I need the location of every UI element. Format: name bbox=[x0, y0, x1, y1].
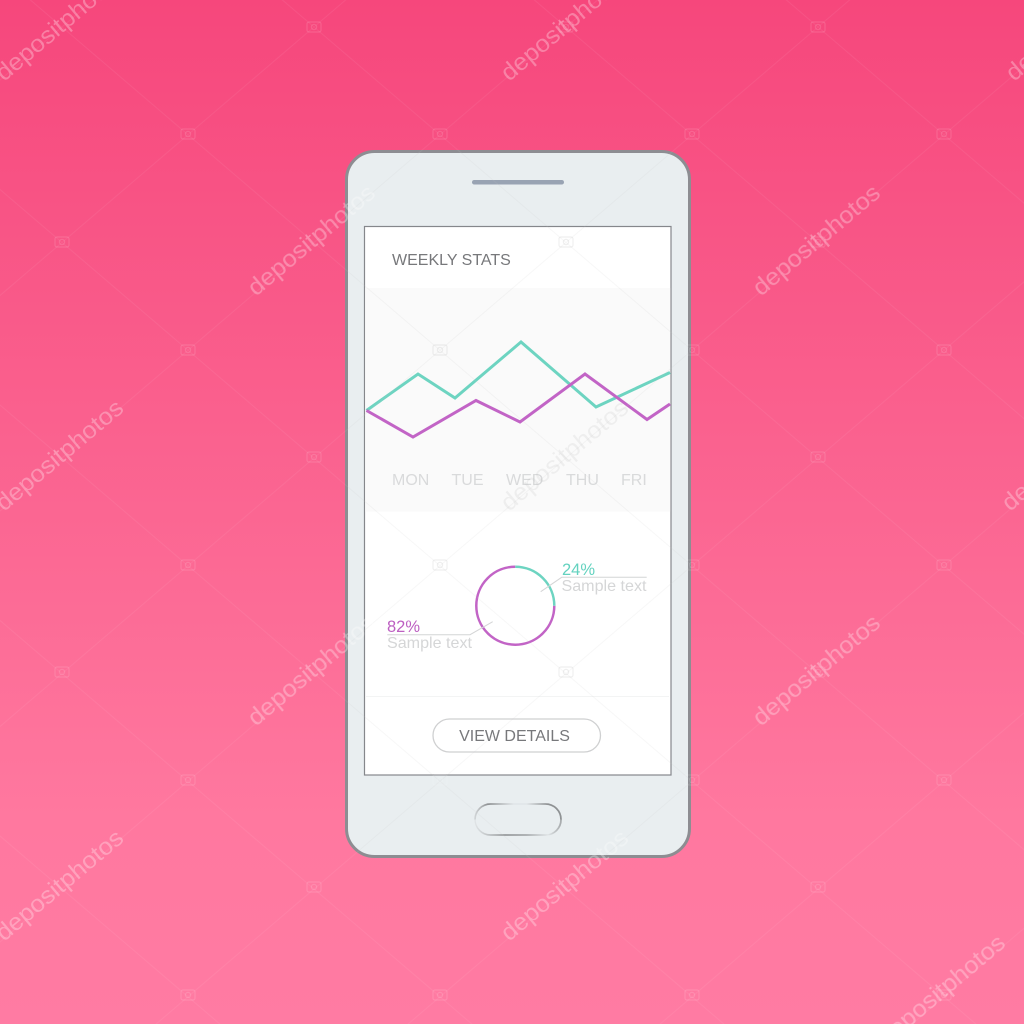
watermark text: depositphotos bbox=[496, 394, 634, 517]
magenta line series bbox=[366, 374, 670, 437]
weekday labels: FRI bbox=[621, 472, 647, 489]
teal line series bbox=[366, 342, 670, 410]
watermark text: depositphotos bbox=[748, 609, 886, 732]
watermark text: depositphotos bbox=[496, 824, 634, 947]
button: view details bbox=[433, 719, 600, 752]
callout: 82% bbox=[387, 618, 493, 652]
callout: 82%: 82% bbox=[387, 618, 420, 636]
panel: line chart bbox=[365, 288, 670, 512]
callout: 82%: Sample text bbox=[387, 634, 473, 652]
callout: 24%: Sample text bbox=[562, 577, 647, 595]
donut magenta segment bbox=[476, 567, 554, 645]
heading: weekly stats: WEEKLY STATS bbox=[392, 252, 511, 269]
phone bbox=[346, 152, 690, 856]
phone body bbox=[346, 152, 690, 856]
watermark text: depositphotos bbox=[243, 179, 381, 302]
weekday labels: TUE bbox=[452, 472, 484, 489]
callout: 24% bbox=[541, 561, 647, 595]
weekday labels bbox=[392, 472, 647, 489]
weekday labels: THU bbox=[566, 472, 599, 489]
speaker bbox=[472, 180, 564, 184]
button: view details: VIEW DETAILS bbox=[459, 728, 570, 745]
watermark text: depositphotos bbox=[748, 179, 886, 302]
callout: 24%: 24% bbox=[562, 561, 595, 579]
weekday labels: MON bbox=[392, 472, 429, 489]
screen bbox=[364, 226, 671, 775]
donut teal segment bbox=[515, 567, 554, 606]
home button bbox=[475, 804, 561, 835]
watermark text: depositphotos bbox=[243, 609, 381, 732]
panel: donut chart bbox=[387, 561, 647, 652]
weekday labels: WED bbox=[506, 472, 543, 489]
